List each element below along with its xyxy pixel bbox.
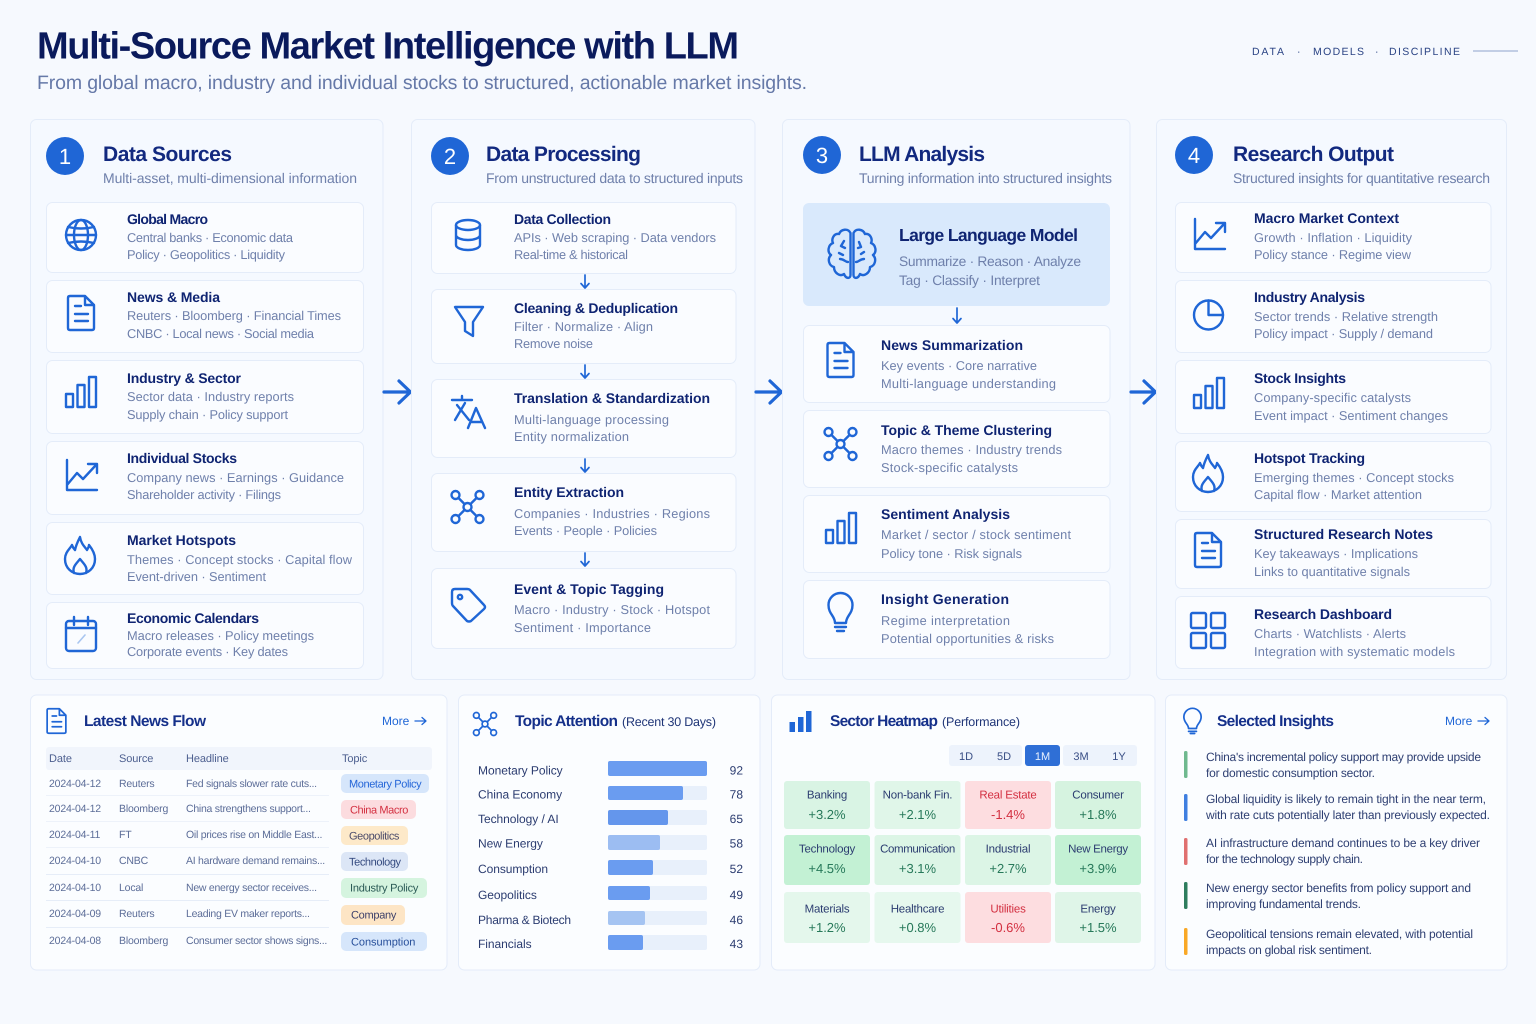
heatmap grid: Utilities (990, 904, 1026, 916)
period tabs (949, 745, 1137, 766)
card: topic and theme clustering: Topic & Theme Clustering (881, 422, 1052, 438)
news row 6: Leading EV maker reports... (186, 908, 310, 920)
news row 2: 2024-04-12 (49, 803, 101, 815)
card: translation and standardization: Multi-language processing (514, 412, 669, 427)
icon: flame (1193, 455, 1223, 492)
news row 4 (46, 848, 408, 871)
news row 5: Industry Policy (350, 882, 419, 894)
panel: sector heatmap (772, 695, 1155, 970)
insight 5: impacts on global risk sentiment. (1206, 943, 1372, 957)
card: hotspot tracking: Hotspot Tracking (1254, 450, 1365, 466)
icon: light bulb (828, 593, 852, 631)
heatmap grid: +0.8% (899, 920, 937, 935)
news row 7 (46, 928, 427, 951)
table header: Topic (342, 753, 368, 765)
card: macro market context: Macro Market Context (1254, 210, 1399, 226)
card: research dashboard: Research Dashboard (1254, 606, 1392, 622)
card: industry and sector: Supply chain · Policy support (127, 407, 288, 422)
step badge 4: 4 (1188, 143, 1200, 168)
heading: topic attention: (Recent 30 Days) (622, 715, 716, 729)
news row 6: Reuters (119, 908, 155, 920)
icon: bar chart (66, 377, 96, 407)
step badge 1: 1 (59, 144, 71, 169)
card: sentiment analysis (804, 496, 1110, 572)
heading: latest news flow: Latest News Flow (84, 713, 207, 730)
card: global macro: Central banks · Economic data (127, 230, 294, 245)
icon: brain (829, 230, 875, 278)
heading: selected insights: Selected Insights (1217, 713, 1334, 730)
card: news summarization: Key events · Core narrative (881, 358, 1037, 373)
top right tagline: DATA (1252, 46, 1284, 58)
arrow: down (581, 275, 589, 288)
arrow: down (581, 459, 589, 472)
news row 3: 2024-04-11 (49, 829, 100, 841)
card: industry analysis: Industry Analysis (1254, 289, 1365, 305)
bar chart: topic attention (478, 761, 743, 951)
icon: calendar (66, 617, 96, 651)
news row 1: 2024-04-12 (49, 778, 101, 790)
card: stock insights: Event impact · Sentiment changes (1254, 408, 1448, 423)
bar chart: topic attention: 58 (730, 836, 743, 850)
top right tagline: MODELS (1313, 46, 1364, 58)
icon: solid bars (790, 711, 812, 732)
subtitle: From global macro, industry and individual stocks to structured, actionable market insights. (37, 72, 807, 94)
card: macro market context: Growth · Inflation · Liquidity (1254, 230, 1413, 245)
icon: network (824, 428, 856, 460)
bar chart: topic attention: Geopolitics (478, 888, 537, 902)
heatmap grid: +4.5% (808, 861, 846, 876)
news row 7: 2024-04-08 (49, 935, 101, 947)
hero card: large language model: Summarize · Reason · Analyze (899, 254, 1081, 269)
news row 5: 2024-04-10 (49, 882, 101, 894)
card: insight generation: Regime interpretation (881, 613, 1010, 628)
card: news and media: News & Media (127, 289, 220, 305)
heatmap grid: +1.5% (1079, 920, 1117, 935)
card: hotspot tracking: Capital flow · Market attention (1254, 487, 1422, 502)
news row 3: Geopolitics (349, 830, 400, 842)
heatmap grid: Technology (799, 844, 856, 856)
heatmap grid: +3.2% (808, 807, 846, 822)
card: individual stocks: Shareholder activity · Filings (127, 487, 281, 502)
card: hotspot tracking: Emerging themes · Concept stocks (1254, 470, 1454, 485)
arrow: analysis to output (1131, 381, 1156, 403)
card: sentiment analysis: Sentiment Analysis (881, 506, 1010, 522)
table header: Source (119, 753, 153, 765)
link: more: More (1445, 714, 1473, 728)
heading: sector heatmap: (Performance) (942, 715, 1020, 729)
news row 7: Consumer sector shows signs... (186, 935, 327, 947)
period tabs: 1M (1035, 751, 1050, 763)
heatmap grid: Materials (805, 904, 850, 916)
card: structured research notes: Structured Research Notes (1254, 526, 1433, 542)
news row 3 (46, 822, 408, 845)
card: industry and sector (46, 360, 364, 434)
link: more: More (382, 714, 410, 728)
card: stock insights: Stock Insights (1254, 370, 1346, 386)
icon: network (473, 712, 497, 736)
card: news and media (46, 280, 364, 352)
card: news and media: CNBC · Local news · Social media (127, 326, 315, 341)
insight 4 (1184, 881, 1471, 911)
card: news summarization: News Summarization (881, 337, 1023, 353)
icon: funnel (455, 307, 483, 336)
insight 1 (1184, 750, 1481, 780)
heading: topic attention: Topic Attention (515, 713, 618, 730)
card: news summarization (804, 326, 1110, 402)
card: sentiment analysis: Policy tone · Risk signals (881, 546, 1022, 561)
card: translation and standardization: Entity normalization (514, 429, 629, 444)
icon: document (47, 709, 66, 733)
card: industry and sector: Sector data · Industry reports (127, 389, 294, 404)
arrow: down (581, 553, 589, 566)
step badge 4 (1175, 136, 1213, 174)
icon: translate (452, 396, 485, 428)
icon: line chart (1195, 219, 1225, 249)
title: Multi-Source Market Intelligence with LLM (37, 26, 739, 68)
icon: tag (452, 589, 485, 622)
heatmap grid: +1.8% (1079, 807, 1117, 822)
card: cleaning and deduplication (432, 290, 736, 364)
icon: light bulb (1184, 708, 1201, 734)
news row 5: Local (119, 882, 143, 894)
card: research dashboard: Integration with systematic models (1254, 644, 1455, 659)
card: macro market context: Policy stance · Regime view (1254, 247, 1412, 262)
bar chart: topic attention: 52 (730, 862, 743, 876)
subheading: Structured insights for quantitative research (1233, 170, 1490, 186)
top right tagline (1252, 46, 1518, 58)
insight 1: China's incremental policy support may provide upside (1206, 750, 1481, 764)
insight 3: AI infrastructure demand continues to be a key driver (1206, 836, 1480, 850)
panel: llm analysis (782, 120, 1130, 680)
icon: database (456, 220, 480, 250)
heading: topic attention (515, 713, 716, 730)
heading: data processing: Data Processing (486, 143, 641, 166)
card: market hotspots (46, 522, 364, 594)
card: economic calendars (46, 602, 364, 668)
card: event and topic tagging (432, 568, 736, 648)
table header: Headline (186, 753, 229, 765)
card: insight generation: Insight Generation (881, 591, 1009, 607)
icon: line chart (67, 460, 97, 490)
insight 2: Global liquidity is likely to remain tight in the near term, (1206, 792, 1486, 806)
heading: data sources: Data Sources (103, 143, 232, 166)
bar chart: topic attention: 92 (730, 764, 743, 778)
news row 4: CNBC (119, 855, 149, 867)
card: event and topic tagging: Macro · Industry · Stock · Hotspot (514, 602, 710, 617)
icon: globe (66, 220, 96, 250)
card: sentiment analysis: Market / sector / stock sentiment (881, 527, 1071, 542)
card: insight generation (804, 580, 1110, 658)
period tabs: 1D (959, 751, 973, 763)
card: data collection: Data Collection (514, 211, 611, 227)
insight 4: New energy sector benefits from policy support and (1206, 881, 1471, 895)
heatmap grid: -1.4% (991, 807, 1025, 822)
table header: Date (49, 753, 72, 765)
insight 1: for domestic consumption sector. (1206, 766, 1375, 780)
news row 2: China Macro (350, 804, 408, 816)
panel: research output (1156, 120, 1506, 680)
bar chart: topic attention: Financials (478, 937, 532, 951)
card: market hotspots: Market Hotspots (127, 532, 236, 548)
card: industry analysis: Policy impact · Supply / demand (1254, 326, 1433, 341)
icon: document (68, 296, 94, 330)
bar chart: topic attention: 65 (730, 812, 743, 826)
card: global macro (46, 202, 364, 272)
card: insight generation: Potential opportunities & risks (881, 631, 1054, 646)
icon: network (452, 491, 484, 523)
news row 4: 2024-04-10 (49, 855, 101, 867)
heatmap grid (784, 781, 1141, 943)
news row 1 (49, 774, 429, 793)
panel: topic attention (458, 695, 760, 970)
icon: flame (65, 537, 95, 574)
step badge 1 (46, 137, 84, 175)
heading: research output: Research Output (1233, 143, 1394, 166)
news row 6: 2024-04-09 (49, 908, 101, 920)
news row 4: AI hardware demand remains... (186, 855, 325, 867)
card: translation and standardization: Translation & Standardization (514, 390, 710, 406)
card: event and topic tagging: Event & Topic Tagging (514, 581, 664, 597)
card: stock insights (1176, 360, 1491, 434)
bar chart: topic attention: China Economy (478, 788, 562, 802)
card: structured research notes: Key takeaways · Implications (1254, 546, 1418, 561)
panel: data processing (412, 120, 755, 680)
news row 6: Company (351, 910, 397, 922)
arrow: down (581, 365, 589, 378)
news row 2 (46, 796, 416, 819)
heatmap grid: Healthcare (891, 904, 944, 916)
heatmap grid: +2.7% (989, 861, 1027, 876)
table header (46, 747, 432, 770)
card: industry analysis: Sector trends · Relative strength (1254, 309, 1438, 324)
step badge 2: 2 (444, 144, 456, 169)
insight 2 (1184, 792, 1490, 822)
card: industry and sector: Industry & Sector (127, 370, 242, 386)
card: cleaning and deduplication: Cleaning & Deduplication (514, 300, 678, 316)
news row 4: Technology (349, 856, 402, 868)
card: topic and theme clustering: Stock-specific catalysts (881, 460, 1018, 475)
heatmap grid: +2.1% (899, 807, 937, 822)
heatmap grid: Non-bank Fin. (883, 790, 952, 802)
insight 3: for the technology supply chain. (1206, 852, 1363, 866)
insight 5: Geopolitical tensions remain elevated, with potential (1206, 927, 1473, 941)
heatmap grid: +3.9% (1079, 861, 1117, 876)
news row 2: China strengthens support... (186, 803, 311, 815)
card: entity extraction: Entity Extraction (514, 484, 624, 500)
card: individual stocks (46, 442, 364, 514)
bar chart: topic attention: Consumption (478, 862, 548, 876)
top right tagline: DISCIPLINE (1389, 46, 1460, 58)
panel: latest news flow (30, 695, 447, 970)
card: hotspot tracking (1176, 442, 1491, 512)
heatmap grid: New Energy (1068, 844, 1128, 856)
card: market hotspots: Themes · Concept stocks · Capital flow (127, 552, 353, 567)
card: data collection (432, 202, 736, 274)
news row 1: Reuters (119, 778, 155, 790)
heatmap grid: Real Estate (979, 790, 1037, 802)
card: industry analysis (1176, 280, 1491, 352)
news row 5: New energy sector receives... (186, 882, 317, 894)
card: global macro: Global Macro (127, 211, 208, 227)
heading: sector heatmap (830, 713, 1020, 730)
news row 2: Bloomberg (119, 803, 168, 815)
news row 7: Bloomberg (119, 935, 168, 947)
card: entity extraction (432, 474, 736, 552)
card: data collection: Real-time & historical (514, 247, 628, 262)
hero card: large language model: Large Language Model (899, 225, 1078, 245)
heatmap grid: Communication (880, 844, 955, 856)
bar chart: topic attention: Pharma & Biotech (478, 913, 571, 927)
heatmap grid: Banking (807, 790, 847, 802)
icon: document (828, 343, 854, 377)
insight 3 (1184, 836, 1480, 866)
step badge 3 (803, 136, 841, 174)
card: event and topic tagging: Sentiment · Importance (514, 620, 651, 635)
top right tagline: · (1297, 46, 1300, 58)
card: topic and theme clustering (804, 410, 1110, 488)
card: news summarization: Multi-language understanding (881, 376, 1056, 391)
heatmap grid: Industrial (986, 844, 1030, 856)
news row 1: Fed signals slower rate cuts... (186, 778, 317, 790)
subheading: Multi-asset, multi-dimensional information (103, 170, 357, 186)
card: research dashboard: Charts · Watchlists · Alerts (1254, 626, 1406, 641)
top right tagline: · (1375, 46, 1378, 58)
insight 2: with rate cuts potentially later than previously expected. (1205, 808, 1490, 822)
card: economic calendars: Macro releases · Policy meetings (127, 628, 314, 643)
link: more (1445, 714, 1489, 728)
bar chart: topic attention: New Energy (478, 836, 543, 850)
step badge 2 (431, 137, 469, 175)
period tabs: 1Y (1112, 751, 1126, 763)
hero card: large language model: Tag · Classify · Interpret (899, 273, 1040, 288)
arrow: processing to analysis (756, 381, 782, 403)
news row 3: Oil prices rise on Middle East... (186, 829, 322, 841)
news row 3: FT (119, 829, 132, 841)
card: cleaning and deduplication: Remove noise (514, 336, 593, 351)
card: cleaning and deduplication: Filter · Normalize · Align (514, 319, 653, 334)
period tabs: 3M (1073, 751, 1089, 763)
card: stock insights: Company-specific catalysts (1254, 390, 1411, 405)
card: structured research notes (1176, 520, 1491, 588)
icon: bar chart (826, 513, 856, 543)
card: macro market context (1176, 202, 1491, 272)
panel: selected insights (1166, 695, 1507, 970)
heatmap grid: +3.1% (899, 861, 937, 876)
panel: data sources (30, 120, 383, 680)
icon: pie chart (1194, 300, 1223, 330)
bar chart: topic attention: Monetary Policy (478, 764, 563, 778)
bar chart: topic attention: 78 (730, 788, 743, 802)
news row 5 (46, 874, 427, 898)
card: individual stocks: Individual Stocks (127, 450, 237, 466)
insight 5 (1184, 927, 1473, 957)
period tabs: 5D (997, 751, 1011, 763)
card: economic calendars: Corporate events · Key dates (127, 644, 288, 659)
arrow: down (953, 308, 961, 323)
heatmap grid: Consumer (1072, 790, 1124, 802)
card: structured research notes: Links to quantitative signals (1254, 564, 1410, 579)
hero card: large language model (803, 203, 1110, 306)
card: global macro: Policy · Geopolitics · Liquidity (127, 247, 286, 262)
bar chart: topic attention: 49 (730, 888, 743, 902)
heatmap grid: Energy (1080, 904, 1116, 916)
card: economic calendars: Economic Calendars (127, 610, 259, 626)
news row 1: Monetary Policy (349, 778, 422, 790)
step badge 3: 3 (816, 143, 828, 168)
link: more (382, 714, 426, 728)
card: research dashboard (1176, 596, 1491, 668)
icon: bar chart (1194, 378, 1224, 408)
card: news and media: Reuters · Bloomberg · Financial Times (127, 308, 341, 323)
news row 6 (46, 900, 405, 925)
card: data collection: APIs · Web scraping · Data vendors (514, 230, 716, 245)
card: individual stocks: Company news · Earnings · Guidance (127, 470, 344, 485)
subheading: From unstructured data to structured inputs (486, 170, 743, 186)
heatmap grid: -0.6% (991, 920, 1025, 935)
card: entity extraction: Companies · Industries · Regions (514, 506, 710, 521)
bar chart: topic attention: Technology / AI (478, 812, 559, 826)
bar chart: topic attention: 43 (730, 937, 743, 951)
news row 7: Consumption (351, 936, 415, 948)
heading: llm analysis: LLM Analysis (859, 143, 985, 166)
card: topic and theme clustering: Macro themes · Industry trends (881, 442, 1062, 457)
icon: document (1195, 533, 1221, 567)
bar chart: topic attention: 46 (730, 913, 743, 927)
card: translation and standardization (432, 380, 736, 458)
insight 4: improving fundamental trends. (1206, 897, 1361, 911)
card: market hotspots: Event-driven · Sentiment (127, 569, 266, 584)
heatmap grid: +1.2% (808, 920, 846, 935)
icon: dashboard grid (1191, 613, 1225, 648)
subheading: Turning information into structured insights (859, 170, 1112, 186)
arrow: sources to processing (384, 381, 410, 403)
card: entity extraction: Events · People · Policies (514, 523, 657, 538)
heading: sector heatmap: Sector Heatmap (830, 713, 938, 730)
